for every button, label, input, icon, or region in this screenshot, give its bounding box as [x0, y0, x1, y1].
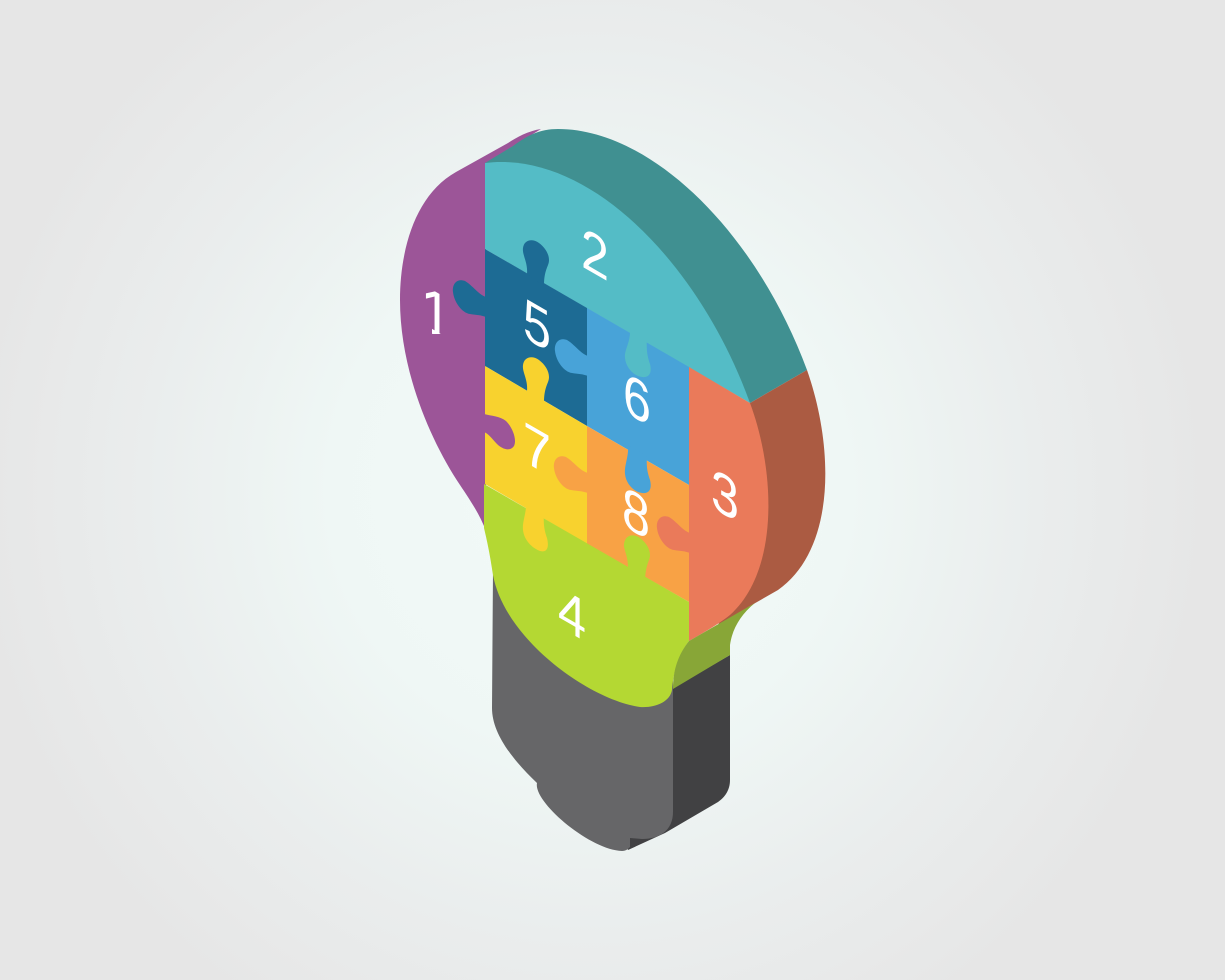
- number 2: 2: [581, 215, 609, 295]
- segment 4: green: [484, 484, 689, 707]
- number 5: 5: [523, 286, 551, 366]
- segment 5: dark blue: [485, 249, 587, 426]
- number 3: 3: [711, 456, 739, 536]
- bulb base: front: [492, 570, 673, 851]
- segment 3: coral: [689, 367, 768, 641]
- number 6: 6: [623, 360, 651, 440]
- bulb base: dark side: [620, 655, 730, 850]
- segment 2: light teal: [485, 162, 750, 403]
- number 8: 8: [622, 474, 650, 554]
- segment 4 side: olive: [673, 603, 755, 689]
- segment 8: orange: [587, 426, 689, 602]
- number 7: 7: [523, 410, 551, 490]
- segment 2 side: dark teal: [485, 129, 807, 403]
- number 4: 4: [558, 575, 586, 655]
- number 1: 1: [421, 269, 451, 359]
- segment 7: yellow: [485, 366, 587, 544]
- puzzle tabs: [453, 240, 690, 582]
- isometric puzzle lightbulb infographic: [162, 64, 1016, 918]
- segment 6: blue: [587, 308, 689, 485]
- segment 1: purple: [400, 129, 541, 531]
- segment 3 side: brown: [718, 370, 825, 628]
